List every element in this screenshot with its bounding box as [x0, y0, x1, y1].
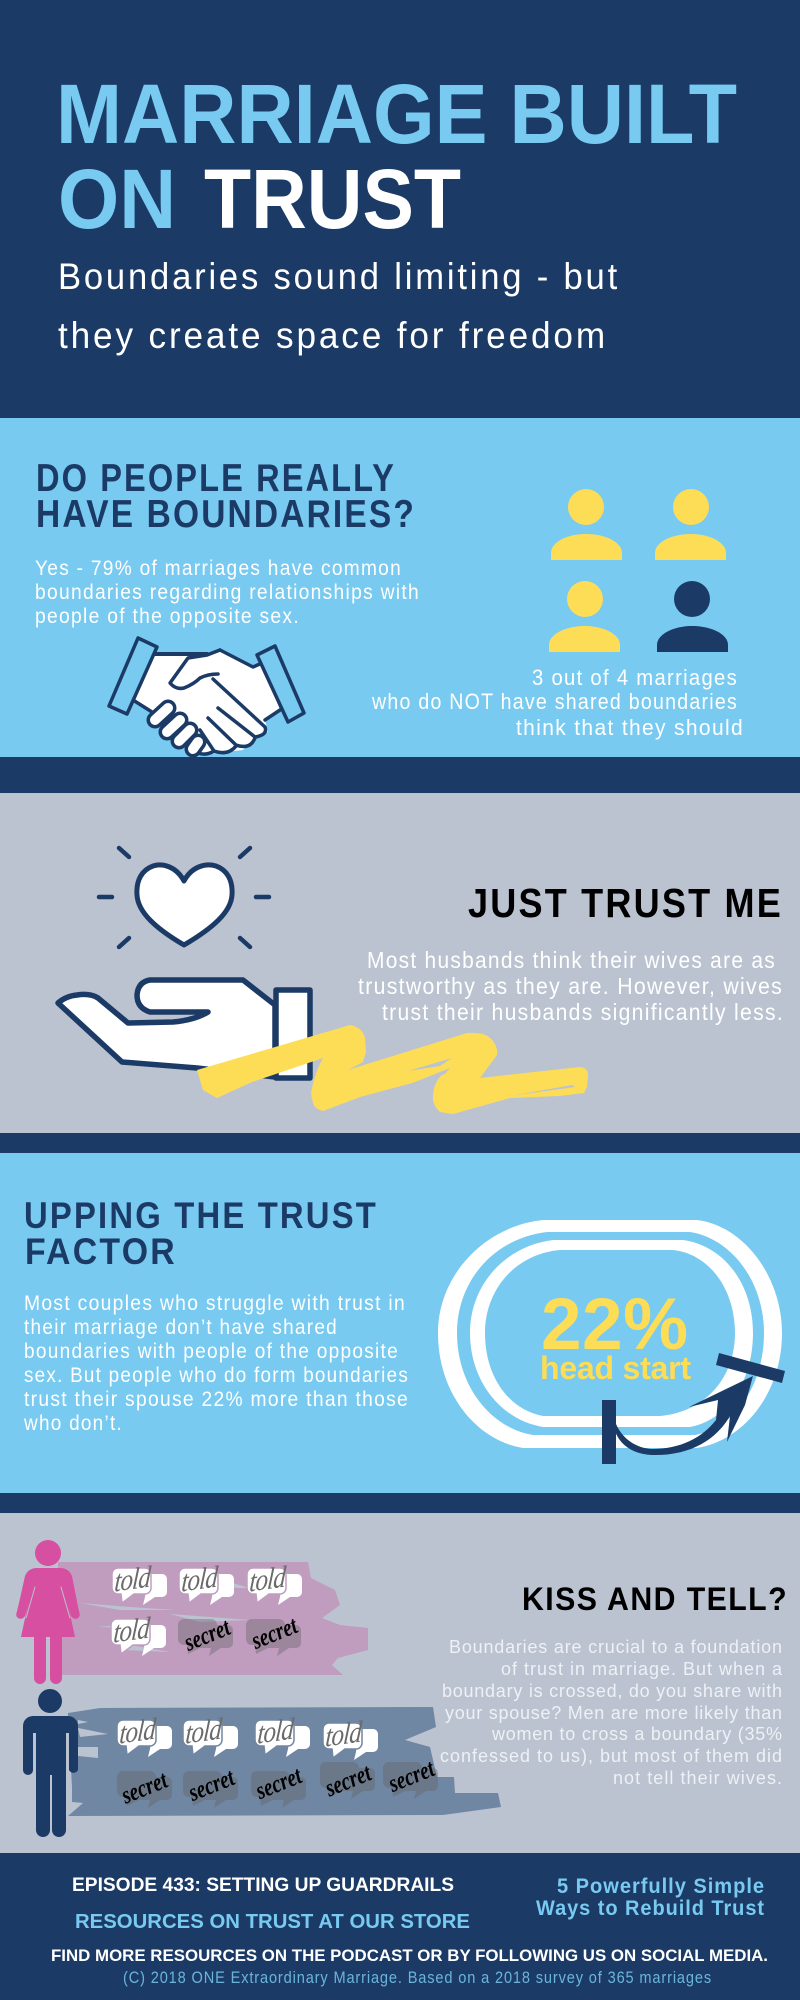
- icon: woman: [16, 1540, 80, 1684]
- told bubble 2: told: [180, 1559, 220, 1599]
- text: couples who struggle with trust: Most couples who struggle with trust in: [24, 1292, 406, 1315]
- told bubble 3: [247, 1559, 302, 1605]
- told bubble 3: told: [256, 1711, 296, 1751]
- text: couples who struggle with trust: [23, 1292, 409, 1435]
- title: ON: [58, 152, 176, 246]
- told bubble 4: [323, 1714, 378, 1760]
- subtitle: [58, 256, 620, 356]
- chart: running track: [438, 1220, 782, 1448]
- text: boundaries are crucial: [440, 1637, 783, 1788]
- told bubble 1: told: [113, 1559, 153, 1599]
- text: episode 433: EPISODE 433: SETTING UP GUARDRAILS: [72, 1874, 454, 1896]
- brush: men backdrop: [68, 1707, 501, 1816]
- heading: do people really have boundaries: [36, 457, 416, 536]
- stat: 22 percent head start: head start: [540, 1350, 691, 1386]
- person 2: [655, 489, 726, 560]
- told bubble 1: [112, 1559, 167, 1605]
- heading: do people really have boundaries: HAVE BOUNDARIES?: [36, 493, 416, 536]
- text: find more resources: FIND MORE RESOURCES ON THE PODCAST OR BY FOLLOWING US ON SOCIAL MEDIA.: [51, 1946, 768, 1965]
- icon: heart with rays: [99, 848, 269, 947]
- text: couples who struggle with trust: their marriage don’t have shared: [24, 1316, 338, 1339]
- secret bubble 5: secret: [384, 1755, 439, 1798]
- panel: kiss and tell: [0, 1513, 800, 1853]
- text: boundaries are crucial: boundary is crossed, do you share with: [442, 1681, 782, 1701]
- text: resources on trust: RESOURCES ON TRUST AT OUR STORE: [75, 1910, 470, 1933]
- text: 79 percent of marriages: boundaries regarding relationships with: [35, 581, 420, 604]
- text: couples who struggle with trust: sex. But people who do form boundaries: [24, 1364, 409, 1387]
- divider band 3: [0, 1493, 800, 1513]
- told bubble 1: [117, 1711, 172, 1757]
- group: men told bubbles: [117, 1711, 378, 1760]
- text: 79 percent of marriages: [35, 557, 420, 628]
- text: 5 powerfully simple ways: Ways to Rebuild Trust: [536, 1897, 765, 1920]
- icon: man: [23, 1689, 78, 1837]
- panel: upping the trust factor: [0, 1153, 800, 1493]
- heading: upping the trust factor: UPPING THE TRUST: [24, 1194, 378, 1236]
- arrow: start line to finish line: [602, 1353, 785, 1464]
- panel: just trust me: [0, 793, 800, 1133]
- text: 3 out of 4 marriages: who do NOT have shared boundaries: [371, 689, 738, 714]
- text: 5 powerfully simple ways: 5 Powerfully Simple: [557, 1875, 765, 1898]
- text: 79 percent of marriages: people of the opposite sex.: [35, 605, 300, 628]
- stat: 22 percent head start: 22%: [541, 1284, 688, 1365]
- heading: upping the trust factor: [24, 1194, 378, 1272]
- text: husbands and wives: [358, 947, 784, 1025]
- panel: footer: [0, 1853, 800, 2000]
- told bubble 3: [255, 1711, 310, 1757]
- brush stroke: yellow scribble: [197, 1025, 588, 1114]
- brush: women backdrop: [58, 1562, 368, 1675]
- text: boundaries are crucial: your spouse? Men are more likely than: [445, 1703, 782, 1723]
- subtitle: Boundaries sound limiting - but: [58, 256, 620, 297]
- secret bubble 4: secret: [321, 1759, 376, 1803]
- told bubble 1: told: [118, 1711, 158, 1751]
- text: boundaries are crucial: confessed to us), but most of them did: [440, 1746, 782, 1766]
- secret bubble 2: secret: [184, 1764, 239, 1807]
- text: boundaries are crucial: not tell their wives.: [613, 1768, 782, 1788]
- heading: kiss and tell: KISS AND TELL?: [522, 1581, 788, 1617]
- told bubble 3: told: [248, 1559, 288, 1599]
- text: 3 out of 4 marriages: think that they should: [516, 715, 744, 740]
- text: boundaries are crucial: of trust in marriage. But when a: [501, 1659, 783, 1679]
- told bubble 4: told: [324, 1714, 364, 1754]
- title: [56, 67, 737, 246]
- text: boundaries are crucial: women to cross a boundary (35%: [491, 1724, 782, 1744]
- secret bubble 1: secret: [117, 1766, 172, 1810]
- panel: header background: [0, 0, 800, 418]
- group: men secret bubbles: [117, 1755, 439, 1810]
- told bubble 4: told: [112, 1610, 152, 1650]
- secret bubble 3: secret: [251, 1762, 306, 1805]
- told bubble 2: [179, 1559, 234, 1605]
- text: couples who struggle with trust: who don’t.: [23, 1412, 123, 1435]
- text: 3 out of 4 marriages: [371, 665, 744, 740]
- secret bubble 1: secret: [180, 1614, 235, 1657]
- group: women secret bubbles: [178, 1612, 302, 1657]
- panel: do people really have boundaries: [0, 418, 800, 757]
- title: TRUST: [204, 152, 461, 246]
- text: 5 powerfully simple ways: [536, 1875, 765, 1920]
- text: boundaries are crucial: Boundaries are crucial to a foundation: [449, 1637, 782, 1657]
- title: MARRIAGE BUILT: [56, 67, 737, 161]
- group: women told bubbles: [111, 1559, 302, 1656]
- divider band 2: [0, 1133, 800, 1153]
- person 3: [549, 581, 620, 652]
- person 4: [657, 581, 728, 652]
- text: 79 percent of marriages: Yes - 79% of marriages have common: [35, 557, 402, 580]
- heading: do people really have boundaries: DO PEOPLE REALLY: [36, 457, 396, 500]
- told bubble 2: [183, 1711, 238, 1757]
- text: couples who struggle with trust: trust their spouse 22% more than those: [24, 1388, 409, 1411]
- secret bubble 2: secret: [247, 1612, 302, 1655]
- icon: four people, three of four yellow: [549, 489, 728, 652]
- told bubble 4: [111, 1610, 166, 1656]
- heading: upping the trust factor: FACTOR: [25, 1230, 177, 1272]
- icon: handshake: [109, 638, 304, 755]
- subtitle: they create space for freedom: [58, 315, 608, 356]
- text: 3 out of 4 marriages: 3 out of 4 marriages: [532, 665, 738, 690]
- told bubble 2: told: [184, 1711, 224, 1751]
- text: couples who struggle with trust: boundaries with people of the opposite: [24, 1340, 399, 1363]
- divider band 1: [0, 757, 800, 793]
- text: copyright and survey note: (C) 2018 ONE Extraordinary Marriage. Based on a 2018 survey of 365 marriages: [123, 1968, 712, 1987]
- person 1: [551, 489, 622, 560]
- icon: open hand: [58, 980, 310, 1078]
